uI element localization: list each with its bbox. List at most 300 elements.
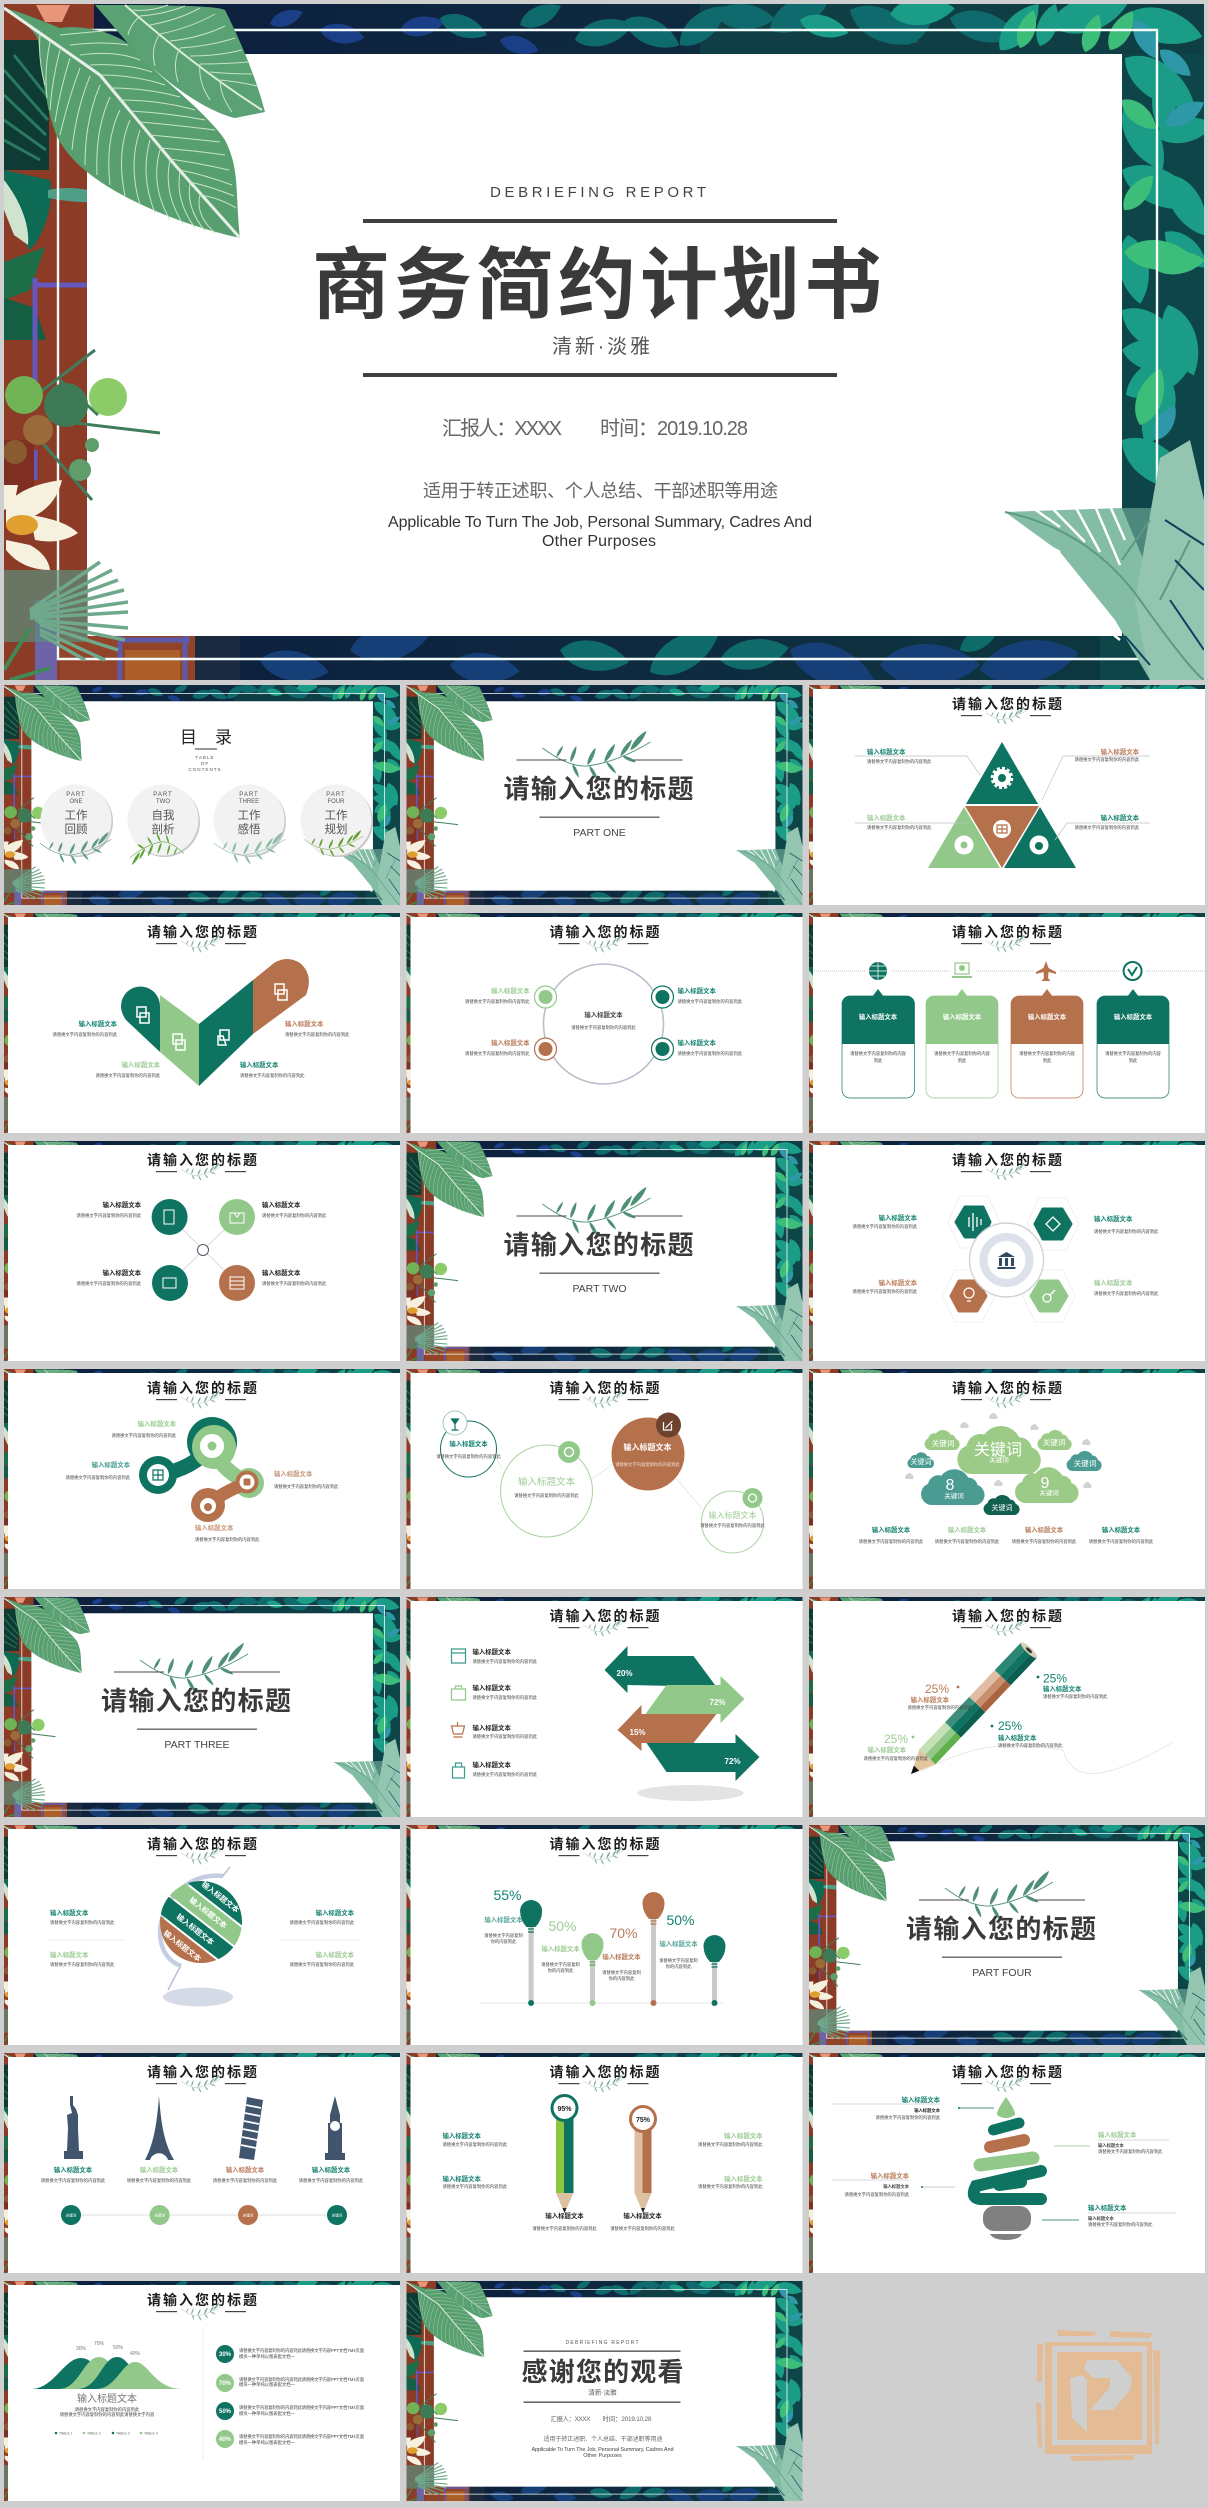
cloud chart: 关键词: [944, 1491, 964, 1500]
heading ornament: [961, 1162, 1051, 1181]
labels: 请替换文字内容复制你的内容到此: [77, 1212, 142, 1219]
pencil swoosh: [921, 1742, 1173, 1774]
labels: 输入标题文本: [584, 1010, 623, 1019]
part one circle: 工作: [64, 809, 88, 822]
labels: 请替换文字内容复制你的内容到此: [442, 2141, 508, 2148]
section rule: [540, 1272, 660, 1274]
laurel ornament: [945, 1869, 1053, 1921]
card 4: 到此: [1129, 1057, 1138, 1064]
labels: 请替换文字内容复制你的内容到此: [845, 2191, 910, 2198]
check shape chart: [121, 959, 309, 1086]
part one circle: [40, 784, 113, 865]
list text: 输入标题文本: [472, 1647, 511, 1656]
pencil one: [552, 2096, 577, 2213]
english description: [532, 2447, 674, 2459]
laurel ornament: [542, 1185, 650, 1237]
part label: PART FOUR: [972, 1967, 1032, 1979]
heading ornament: [961, 1390, 1051, 1409]
labels: 输入标题文本: [103, 1200, 142, 1209]
ornament rules: [919, 1899, 1085, 1901]
blob chart: [139, 1417, 264, 1522]
labels: 请替换文字内容复制你的内容到此: [698, 2183, 763, 2190]
labels: 输入标题文本: [868, 1745, 907, 1754]
slide: landmarks: [4, 2046, 405, 2279]
bubble chart: 请替换文字内容复制你的内容到此: [514, 1492, 579, 1499]
cloud chart: 关键词: [1043, 1437, 1065, 1447]
labels: [484, 1915, 698, 1982]
percent list: 70%: [219, 2381, 232, 2387]
labels: 请替换文字内容复制你的内容到此: [867, 758, 932, 765]
arrow chart: [604, 1646, 760, 1801]
pencil two: 75%: [636, 2117, 651, 2124]
heading: 请输入您的标题: [550, 1836, 660, 1852]
bulb chart: [974, 2097, 1041, 2240]
legend: [55, 2431, 158, 2435]
labels: 输入标题文本: [240, 1060, 279, 1069]
english description: Applicable To Turn The Job, Personal Summary, Cadres And: [388, 514, 812, 531]
timeline nodes: 关键词: [243, 2212, 254, 2218]
slide: pencil: [809, 1590, 1208, 1823]
labels: 输入标题文本: [442, 2131, 481, 2140]
labels: 输入标题文本: [659, 1939, 698, 1948]
labels: 输入标题文本: [883, 2183, 910, 2190]
part three circle: PART: [239, 792, 259, 798]
percent list: 模块一种单纯以图表配文档一: [239, 2439, 296, 2446]
percent list: 请替换文字内容复制你的内容到此请替换文字内容PPT文档TM4页面: [239, 2433, 365, 2440]
labels: 请替换文字内容复制你的内容到此: [1088, 2221, 1153, 2228]
labels: 输入标题文本: [1025, 1525, 1064, 1534]
percent list: 请替换文字内容复制你的内容到此请替换文字内容PPT文档TM4页面: [239, 2376, 365, 2383]
landmark labels: 输入标题文本: [54, 2165, 93, 2174]
labels: [442, 2131, 763, 2232]
labels: 输入标题文本: [122, 1060, 161, 1069]
cloud chart: 关键词: [1074, 1458, 1096, 1468]
heading ornament: [558, 1390, 648, 1409]
labels: [864, 1672, 1108, 1762]
labels: 输入标题文本: [879, 1278, 918, 1287]
chart caption: [60, 2392, 155, 2418]
heading: 请输入您的标题: [952, 1380, 1062, 1396]
labels: 请替换文字内容复制你的内容到此: [53, 1031, 118, 1038]
labels: 请替换文字内容复制你的内容到此: [571, 1024, 636, 1031]
labels: 输入标题文本: [867, 813, 906, 822]
labels: 输入标题文本: [902, 2095, 941, 2104]
percent list: 40%: [219, 2437, 232, 2443]
laurel ornament: [542, 729, 650, 781]
slide: cover: [3, 0, 1208, 699]
tagline: 清新·淡雅: [588, 2388, 617, 2396]
arrow chart: 72%: [710, 1698, 726, 1707]
bubble chart: [436, 1411, 765, 1553]
mountain chart: 40%: [130, 2351, 141, 2357]
bulb chart: 70%: [609, 1925, 638, 1941]
labels: 输入标题文本: [1098, 2130, 1137, 2139]
labels: 请替换文字内容复制你的内容到此: [1012, 1538, 1077, 1545]
arrow chart: 15%: [630, 1728, 646, 1737]
labels: 请替换文字内容复制你的内容到此: [262, 1280, 327, 1287]
labels: 请替换文字内容复制你的内容到此: [1089, 1538, 1154, 1545]
labels: 输入标题文本: [724, 2174, 763, 2183]
mountain chart: [31, 2341, 183, 2389]
bubble chart: 输入标题文本: [449, 1439, 488, 1448]
labels: 请替换文字内容复制你的内容到此: [1094, 1290, 1159, 1297]
labels: 25%: [884, 1732, 908, 1746]
cloud chart: 关键词: [974, 1441, 1022, 1459]
chart caption: 请替换文字内容复制你的内容到此: [75, 2406, 140, 2413]
arrow chart: 20%: [616, 1669, 633, 1678]
slide: table of contents: [4, 678, 405, 911]
part four circle: PART: [326, 792, 346, 798]
labels: 输入标题文本: [138, 1419, 177, 1428]
section title: 请输入您的标题: [906, 1914, 1096, 1944]
part label: PART THREE: [164, 1739, 230, 1751]
triangle chart: [928, 742, 1076, 868]
labels: 请替换文字内容复制你的内容到此: [50, 1961, 115, 1968]
labels: 你的内容到此: [491, 1938, 517, 1945]
labels: 请替换文字内容复制你的内容到此: [50, 1919, 115, 1926]
percent list: 模块一种单纯以图表配文档一: [239, 2353, 296, 2360]
card 3: 请替换文字内容复制你的内容: [1019, 1050, 1076, 1057]
labels: 输入标题文本: [491, 1038, 530, 1047]
heading: 请输入您的标题: [147, 1836, 257, 1852]
labels: 输入标题文本: [316, 1908, 355, 1917]
part two circle: 剖析: [152, 822, 174, 836]
chart caption: 输入标题文本: [77, 2392, 137, 2405]
globe bands: 输入标题文本: [188, 1895, 230, 1931]
pencil chart: [903, 1640, 1039, 1782]
heading ornament: [558, 1618, 648, 1637]
top rule: [524, 2350, 680, 2352]
slide: pencil progress: [406, 2046, 807, 2279]
card 2: 请替换文字内容复制你的内容: [934, 1050, 991, 1057]
pointers: [921, 2107, 1090, 2220]
presenter and date: 时间：2019.10.28: [602, 2414, 652, 2423]
ring: [544, 964, 664, 1084]
bubble chart: 输入标题文本: [708, 1510, 756, 1520]
ornament rules: [516, 759, 682, 761]
labels: 输入标题文本: [103, 1268, 142, 1277]
landmark labels: 请替换文字内容复制你的内容到此: [127, 2177, 192, 2184]
part four circle: [300, 784, 373, 857]
labels: 25%: [925, 1682, 949, 1696]
labels: 输入标题文本: [678, 1038, 716, 1047]
cloud chart: 9: [1041, 1475, 1050, 1492]
bulb chart: [482, 1887, 726, 2006]
english description: Other Purposes: [583, 2453, 622, 2459]
section title: 请输入您的标题: [504, 774, 694, 804]
slide: thank you: [406, 2274, 807, 2507]
labels: 输入标题文本: [911, 1695, 950, 1704]
heading ornament: [156, 1390, 246, 1409]
subtitle: debriefing report: DEBRIEFING REPORT: [490, 184, 706, 201]
slide: mountain chart: [4, 2274, 405, 2507]
heading ornament: [156, 1162, 246, 1181]
labels: 25%: [1043, 1672, 1067, 1686]
labels: 输入标题文本: [867, 747, 906, 756]
labels: 请替换文字内容复制你的内容到此: [240, 1072, 305, 1079]
labels: 请替换文字内容复制你的内容到此: [678, 998, 743, 1005]
part three circle: 感悟: [238, 822, 261, 836]
labels: 输入标题文本: [50, 1908, 89, 1917]
ring nodes: [534, 986, 674, 1060]
labels: 请替换文字内容复制你的内容到此: [112, 1432, 177, 1439]
labels: [465, 986, 743, 1057]
labels: 请替换文字内容复制你的内容到此: [935, 1538, 1000, 1545]
usage description: 适用于转正述职、个人总结、干部述职等用途: [423, 481, 778, 501]
labels: 请替换文字内容复制你的内容到此: [96, 1072, 161, 1079]
labels: 请替换文字内容复制你的内容到此: [1094, 1228, 1159, 1235]
labels: 请替换文字内容复制你的内容到此: [698, 2141, 763, 2148]
bubble chart: 请替换文字内容复制你的内容到此: [615, 1461, 680, 1468]
subtitle: DEBRIEFING REPORT: [566, 2340, 638, 2346]
legend: TABLE 1: [59, 2431, 73, 2435]
bulb chart: 50%: [666, 1912, 695, 1928]
list text: 请替换文字内容复制你的内容到此: [472, 1658, 538, 1665]
landmark labels: 输入标题文本: [312, 2165, 351, 2174]
list text: 请替换文字内容复制你的内容到此: [472, 1694, 538, 1701]
labels: 输入标题文本: [1094, 1214, 1133, 1223]
labels: 请替换文字内容复制你的内容到此: [262, 1212, 327, 1219]
part two circle: [128, 784, 200, 866]
labels: 输入标题文本: [545, 2211, 584, 2220]
heading ornament: [558, 1846, 648, 1865]
card 2: 到此: [958, 1057, 967, 1064]
slide: section part one: [406, 678, 807, 911]
labels: 请替换文字内容复制你的内容到此: [274, 1483, 339, 1490]
heading: 请输入您的标题: [952, 1152, 1062, 1168]
labels: 输入标题文本: [879, 1213, 918, 1222]
chart caption: 请替换文字内容复制你的内容到此请替换文字内容: [60, 2411, 155, 2418]
section rule: [137, 1728, 257, 1730]
section rule: [942, 1956, 1062, 1958]
labels: 请替换文字内容复制你的内容到此: [1098, 2148, 1163, 2155]
card 1: 请替换文字内容复制你的内容: [850, 1050, 907, 1057]
heading: 请输入您的标题: [550, 1380, 660, 1396]
labels: 请替换文字内容复制你的内容到此: [859, 1538, 924, 1545]
part four circle: 工作: [324, 809, 348, 822]
labels: 输入标题文本: [541, 1944, 580, 1953]
slide: arrows: [406, 1590, 807, 1823]
circles diagram: [152, 1199, 255, 1301]
slide: triangle diagram: [809, 678, 1208, 911]
laurel ornament: [140, 1641, 248, 1693]
percent list: 30%: [219, 2352, 232, 2358]
table of contents caption: TABLE: [195, 755, 215, 760]
slide: four circles: [4, 1134, 405, 1367]
labels: 请替换文字内容复制你的内容到此: [867, 824, 932, 831]
presenter and date: [550, 2414, 652, 2423]
labels: 输入标题文本: [872, 1525, 911, 1534]
labels: 输入标题文本: [871, 2171, 910, 2180]
bulb chart: 50%: [548, 1918, 577, 1934]
card 2: [926, 989, 998, 1098]
heading: 请输入您的标题: [550, 2064, 660, 2080]
labels: 请替换文字内容复制你的内容到此: [1043, 1693, 1108, 1700]
part label: PART ONE: [573, 827, 626, 839]
list text: 请替换文字内容复制你的内容到此: [472, 1733, 538, 1740]
percent list: [216, 2345, 365, 2448]
card 4: 请替换文字内容复制你的内容: [1105, 1050, 1162, 1057]
slide: check mark diagram: [4, 906, 405, 1139]
part one circle: ONE: [69, 799, 83, 805]
heading ornament: [156, 1846, 246, 1865]
ornament rules: [516, 1215, 682, 1217]
heading: 请输入您的标题: [952, 696, 1062, 712]
legend: TABLE 2: [87, 2431, 101, 2435]
heading: 请输入您的标题: [147, 2292, 257, 2308]
part label: PART TWO: [572, 1283, 627, 1295]
landmark labels: 输入标题文本: [226, 2165, 265, 2174]
labels: 请替换文字内容复制你的内容到此: [678, 1050, 743, 1057]
part four circle: 规划: [324, 822, 348, 836]
heading ornament: [961, 2074, 1051, 2093]
heading ornament: [156, 934, 246, 953]
toc rule: [195, 748, 217, 750]
labels: 输入标题文本: [1088, 2203, 1127, 2212]
list text: 输入标题文本: [472, 1760, 511, 1769]
cloud chart: 关键词: [992, 1503, 1012, 1512]
labels: 请替换文字内容复制你的内容到此: [465, 1050, 530, 1057]
cloud chart: [905, 1413, 1102, 1515]
labels: 请替换文字内容复制你的内容到此: [610, 2225, 675, 2232]
labels: [66, 1419, 339, 1543]
legend: TABLE 3: [116, 2431, 130, 2435]
part four circle: FOUR: [328, 799, 345, 805]
labels: 请替换文字内容复制: [602, 1969, 641, 1976]
labels: 请替换文字内容复制你的内容到此: [442, 2183, 508, 2190]
card 1: [842, 989, 914, 1098]
section title: 请输入您的标题: [101, 1686, 291, 1716]
heading ornament: [961, 934, 1051, 953]
mountain chart: 70%: [94, 2341, 105, 2347]
labels: 输入标题文本: [285, 1019, 324, 1028]
labels: 请替换文字内容复制你的内容到此: [195, 1536, 260, 1543]
labels: 输入标题文本: [1088, 2215, 1114, 2222]
slide: section part four: [809, 1818, 1208, 2051]
hexagon hub chart: [943, 1196, 1079, 1322]
labels: 输入标题文本: [274, 1469, 313, 1478]
labels: 请替换文字内容复制你的内容到此: [853, 1288, 918, 1295]
percent list: 50%: [219, 2409, 232, 2415]
landmark labels: 输入标题文本: [140, 2165, 179, 2174]
bubble chart: 输入标题文本: [624, 1442, 672, 1452]
labels: 输入标题文本: [92, 1460, 131, 1469]
heading: 请输入您的标题: [952, 1608, 1062, 1624]
presenter and date: 汇报人：XXXX: [550, 2414, 591, 2423]
heading: 请输入您的标题: [147, 1380, 257, 1396]
tagline: 清新·淡雅: [552, 335, 650, 358]
ornament rules: [114, 1671, 280, 1673]
cloud chart: 关键词: [989, 1455, 1009, 1464]
labels: 输入标题文本: [1101, 813, 1140, 822]
labels: 输入标题文本: [195, 1523, 234, 1532]
slide: globe: [4, 1818, 405, 2051]
bulb chart: 55%: [493, 1887, 522, 1903]
landmark silhouettes: [64, 2096, 345, 2160]
labels: 输入标题文本: [1101, 747, 1140, 756]
heading: 请输入您的标题: [550, 1608, 660, 1624]
slide: section part two: [406, 1134, 807, 1367]
labels: 请替换文字内容复制你的内容到此: [532, 2225, 597, 2232]
bottom rule: [363, 373, 837, 377]
timeline nodes: 关键词: [332, 2212, 343, 2218]
labels: 请替换文字内容复制你的内容到此: [290, 1961, 355, 1968]
labels: 请替换文字内容复制: [541, 1961, 580, 1968]
labels: 输入标题文本: [79, 1019, 118, 1028]
heading ornament: [558, 934, 648, 953]
labels: 输入标题文本: [1094, 1278, 1133, 1287]
globe bands: 输入标题文本: [200, 1879, 242, 1915]
table of contents caption: OF: [201, 761, 209, 766]
heading: 请输入您的标题: [952, 2064, 1062, 2080]
landmark labels: 请替换文字内容复制你的内容到此: [299, 2177, 364, 2184]
part two circle: TWO: [156, 799, 170, 805]
watermark stamp: [1036, 2330, 1160, 2461]
list text: 输入标题文本: [472, 1683, 511, 1692]
table of contents caption: CONTENTS: [188, 767, 222, 772]
slide: keyword clouds: [809, 1362, 1208, 1595]
labels: 请替换文字内容复制你的内容到此: [998, 1742, 1063, 1749]
labels: 输入标题文本: [914, 2107, 941, 2114]
labels: 请替换文字内容复制你的内容到此: [77, 1280, 142, 1287]
labels: 输入标题文本: [998, 1733, 1037, 1742]
top rule: [363, 219, 837, 223]
labels: 你的内容到此: [666, 1963, 692, 1970]
percent list: 模块一种单纯以图表配文档一: [239, 2410, 296, 2417]
labels: [53, 1019, 350, 1079]
labels: 你的内容到此: [548, 1967, 574, 1974]
heading: 请输入您的标题: [147, 2064, 257, 2080]
bubble chart: 请替换文字内容复制你的内容到此: [700, 1522, 765, 1529]
labels: 请替换文字内容复制你的内容到此: [908, 1704, 973, 1711]
labels: 输入标题文本: [1102, 1525, 1141, 1534]
labels: [853, 1213, 1159, 1297]
usage description: 适用于转正述职、个人总结、干部述职等用途: [544, 2435, 662, 2443]
list text: [472, 1647, 538, 1778]
mountain chart: 30%: [76, 2346, 87, 2352]
landmark labels: 请替换文字内容复制你的内容到此: [213, 2177, 278, 2184]
cloud chart: 关键词: [932, 1438, 954, 1448]
slide: section part three: [4, 1590, 405, 1823]
legend: TABLE 4: [144, 2431, 158, 2435]
landmark labels: 请替换文字内容复制你的内容到此: [41, 2177, 106, 2184]
globe stand: [160, 1867, 233, 2006]
heading ornament: [156, 2074, 246, 2093]
labels: 输入标题文本: [1098, 2142, 1124, 2149]
labels: 输入标题文本: [623, 2211, 662, 2220]
list text: 请替换文字内容复制你的内容到此: [472, 1771, 538, 1778]
labels: 你的内容到此: [609, 1975, 635, 1982]
connector lines: [855, 756, 1150, 840]
labels: 请替换文字内容复制你的内容到此: [465, 998, 530, 1005]
table of contents caption: [188, 755, 222, 772]
slide: linked blobs: [4, 1362, 405, 1595]
labels: 请替换文字内容复制你的内容到此: [285, 1031, 350, 1038]
labels: 请替换文字内容复制你的内容到此: [290, 1919, 355, 1926]
labels: [832, 2095, 1176, 2228]
labels: [48, 1908, 359, 1968]
card 2: 输入标题文本: [943, 1012, 982, 1021]
card 4: [1097, 989, 1169, 1098]
labels: 请替换文字内容复制你的内容到此: [876, 2114, 941, 2121]
slide: bubbles: [406, 1362, 807, 1595]
heading: 请输入您的标题: [147, 1152, 257, 1168]
labels: 输入标题文本: [724, 2131, 763, 2140]
card 3: 到此: [1043, 1057, 1052, 1064]
closing title: 感谢您的观看: [522, 2357, 684, 2387]
labels: [859, 1525, 1154, 1545]
labels: 请替换文字内容复制: [659, 1957, 698, 1964]
